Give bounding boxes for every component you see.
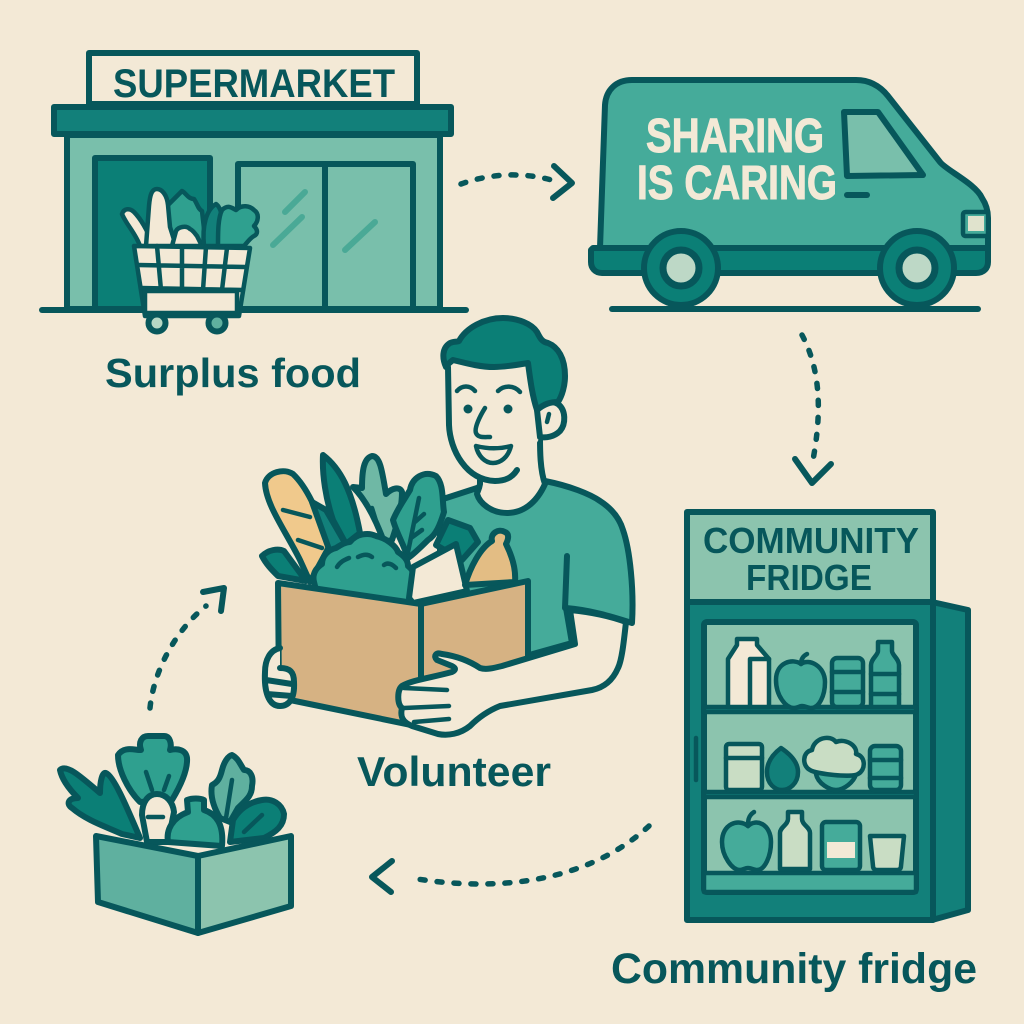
van rear bumper step xyxy=(602,232,616,248)
van body xyxy=(600,80,988,248)
shopping cart with vegetables xyxy=(122,189,258,332)
supermarket sign: SUPERMARKET xyxy=(113,62,395,106)
community fridge xyxy=(687,512,968,920)
fridge sign: COMMUNITY xyxy=(703,520,919,561)
volunteer torso xyxy=(440,481,633,668)
volunteer ear xyxy=(537,402,564,437)
vegetable crate xyxy=(60,736,291,933)
van door handle xyxy=(847,192,867,198)
label: community fridge: Community fridge xyxy=(611,945,977,993)
broccoli xyxy=(313,534,415,606)
volunteer with grocery box xyxy=(262,318,633,735)
shop building xyxy=(67,135,440,309)
fridge sign xyxy=(687,512,933,602)
crate greens xyxy=(60,736,284,846)
arrow: van to fridge xyxy=(795,335,831,483)
arrow: supermarket to van xyxy=(461,166,572,198)
van headlight xyxy=(963,212,988,236)
left hand xyxy=(265,648,294,706)
box flap xyxy=(262,550,306,581)
cardboard box xyxy=(278,581,528,727)
van slogan xyxy=(637,110,837,210)
label: volunteer: Volunteer xyxy=(357,748,551,795)
ground line xyxy=(42,307,466,313)
paper bag xyxy=(409,544,467,603)
shop door xyxy=(95,158,210,309)
arrow: vegetable box to volunteer xyxy=(150,588,224,708)
van window xyxy=(844,112,923,176)
volunteer hair xyxy=(443,318,565,410)
right arm and hand xyxy=(398,610,626,735)
leafy greens xyxy=(312,455,478,560)
supermarket illustration xyxy=(42,53,466,332)
shop window xyxy=(238,164,413,309)
volunteer facial features xyxy=(457,386,520,463)
van slogan: IS CARING xyxy=(637,157,837,210)
van front wheel xyxy=(880,231,954,305)
arrow: fridge to vegetable box xyxy=(372,826,649,892)
fridge shelves xyxy=(704,707,916,892)
van rear wheel xyxy=(644,231,718,305)
volunteer face xyxy=(448,350,546,480)
fridge side panel xyxy=(932,602,968,920)
label: surplus food: Surplus food xyxy=(105,350,361,396)
baguette xyxy=(265,471,330,582)
fridge interior xyxy=(704,622,916,892)
van slogan: SHARING xyxy=(646,110,824,163)
van lower stripe xyxy=(591,248,988,273)
middle shelf items xyxy=(726,738,901,790)
fridge sign: FRIDGE xyxy=(746,557,872,598)
delivery van xyxy=(591,80,988,309)
top shelf items xyxy=(728,639,899,708)
bottom shelf items xyxy=(722,812,904,870)
fridge door handle xyxy=(694,738,698,780)
crate box xyxy=(96,836,291,933)
van ground line xyxy=(612,306,978,312)
shop awning xyxy=(54,107,451,134)
sleeve seam xyxy=(565,556,567,608)
fridge body xyxy=(687,602,933,920)
bananas xyxy=(465,531,515,585)
volunteer neck xyxy=(477,437,545,513)
